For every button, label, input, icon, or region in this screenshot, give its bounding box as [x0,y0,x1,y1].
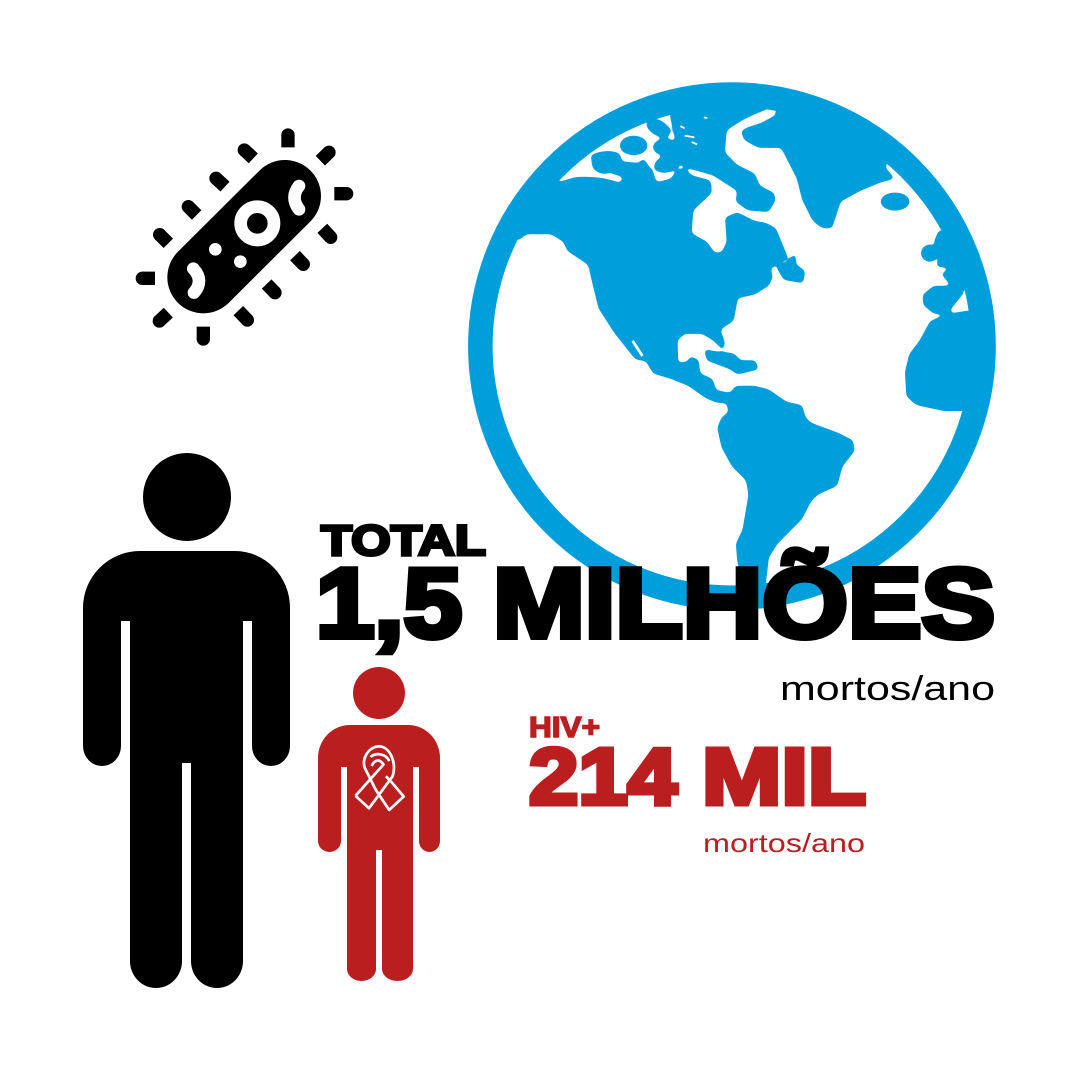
icon: bacterium [136,128,353,346]
heading: total figure [316,548,995,658]
text: total unit: mortos/ano [780,670,995,708]
icon: red person with ribbon [318,667,440,981]
icon: globe [480,95,993,598]
icon: black person [83,453,290,988]
text: HIV unit: mortos/ano [703,828,865,858]
heading: HIV label: HIV+ [529,712,600,744]
heading: total figure: 1,5 [316,548,462,658]
heading: total label: TOTAL [321,517,486,565]
heading: total figure: MILHÕES [493,548,995,658]
heading: HIV figure: MIL [702,732,866,821]
icon: white awareness ribbon [355,746,404,810]
heading: HIV figure [529,732,866,821]
heading: HIV figure: 214 [529,732,678,821]
